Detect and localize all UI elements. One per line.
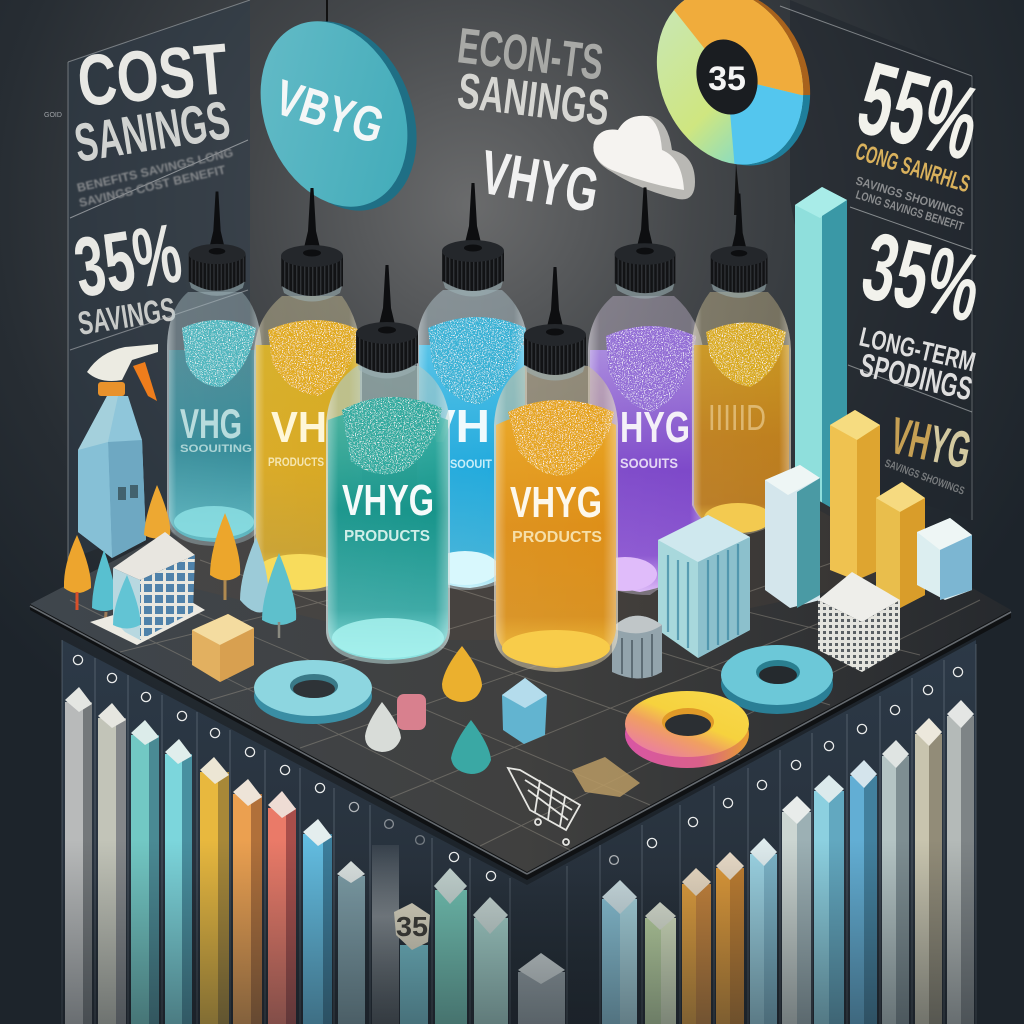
back bottle: gold: VH (271, 403, 327, 452)
panel: platform (30, 490, 1011, 880)
small text: cost savings caption: SAVINGS COST BENEFIT (78, 162, 227, 210)
bar 10 (915, 718, 942, 1024)
bar chart: center bars (394, 868, 565, 1024)
bar chart: back right blocks (830, 410, 972, 608)
statistic: 35% long-term spendings: LONG-TERM (857, 322, 978, 377)
ring: teal right (721, 645, 833, 714)
donut chart: 35: 35 (708, 60, 746, 98)
back bottle: purple: HYG (620, 403, 690, 452)
back bottle: aqua: VHG (180, 400, 242, 447)
statistic: 35% savings (68, 205, 188, 342)
heading: cost savings (70, 29, 234, 174)
panel: right statistics wall (780, 0, 991, 520)
front bottle: amber (494, 267, 618, 672)
back bottle: amber (692, 193, 791, 535)
label: VHYG tag (883, 407, 976, 498)
ring: pink and yellow (625, 691, 749, 768)
bar 6 (782, 796, 811, 1024)
icon: cloud (593, 116, 695, 199)
statistic: 35% long-term spendings (853, 212, 990, 407)
statistic: 35% savings: 35% (68, 205, 188, 315)
panel: cost savings wall (44, 0, 250, 620)
statistic: 55% cost savings: LONG SAVINGS BENEFIT (854, 187, 966, 234)
back bottle: aqua (167, 191, 262, 546)
bar 1 (602, 880, 637, 1024)
bar 2 (645, 902, 676, 1024)
building: small ribbed block (612, 616, 662, 678)
bar 8 (850, 760, 877, 1024)
icon: cardboard box (192, 614, 254, 682)
disc sign: VHYG (234, 0, 444, 233)
bar 5 (750, 838, 777, 1024)
bar: pale blue (917, 518, 972, 600)
ring: teal left (254, 660, 372, 724)
building: mesh cube (818, 572, 900, 672)
bar 7 (268, 791, 296, 1024)
heading: VHYG floating: VHYG (476, 138, 604, 226)
bar 9 (337, 861, 365, 1024)
icon: spray bottle (78, 344, 158, 558)
ghost bar (372, 845, 399, 1024)
bar chart: right ascending bars (602, 700, 974, 1024)
back bottle: blue: VH (424, 400, 490, 452)
back bottle: purple: SOOUITS (620, 455, 678, 471)
bar 8 (303, 819, 332, 1024)
bar fade overlay (60, 840, 980, 1024)
front bottle: teal: PRODUCTS (344, 528, 430, 545)
front bottle: amber: PRODUCTS (512, 529, 602, 546)
tall chart bar: teal (795, 187, 847, 570)
droplet shapes and small blocks (365, 646, 547, 774)
back bottle: purple (588, 187, 704, 595)
panel: economic savings wall: SANINGS (455, 62, 612, 136)
building: striped block (658, 515, 750, 658)
bar 4 (165, 739, 192, 1024)
back bottle: gold (254, 188, 362, 592)
bar 9 (882, 740, 909, 1024)
bar 3 (131, 720, 159, 1024)
bar: yellow tall (830, 410, 880, 580)
bar 7 (814, 775, 844, 1024)
bar teal (434, 868, 467, 1024)
back bottle: blue: SOOUIT (450, 457, 493, 471)
back bottle: aqua: SOOUITING (180, 443, 252, 455)
numbered markers (73, 655, 963, 881)
bar mint (473, 897, 508, 1024)
heading: cost savings: SANINGS (70, 90, 234, 174)
bar 5 (200, 757, 229, 1024)
label: VHYG tag: VHYG (886, 407, 976, 480)
bar 2 (98, 703, 126, 1024)
small side mark: GOID (44, 112, 62, 119)
bar with 35 label: 35 (396, 911, 428, 942)
back bottle: gold: PRODUCTS (268, 455, 324, 469)
bar 11 (947, 700, 974, 1024)
bar dividers (62, 640, 976, 1024)
back bottle: amber: IIIIID (708, 397, 766, 438)
bar 6 (233, 779, 262, 1024)
building: pale tower (765, 465, 820, 608)
back bottle: blue (417, 183, 527, 590)
icon group: cone trees (64, 485, 296, 638)
panel: under platform (62, 640, 976, 1024)
front bottle: teal (326, 265, 450, 664)
front bottle: teal: VHYG (342, 476, 434, 525)
icon: shopping cart (508, 768, 580, 845)
panel: economic savings wall (455, 17, 612, 136)
bar 1 (65, 687, 92, 1024)
panel: economic savings wall: ECON-TS (455, 17, 606, 91)
heading: cost savings: COST (74, 29, 231, 122)
icon: crumpled note (572, 757, 640, 797)
label: VHYG tag: SAVINGS SHOWINGS (883, 458, 966, 498)
bar 4 (716, 852, 744, 1024)
bar chart: left descending bars (65, 687, 399, 1024)
bar 3 (682, 868, 711, 1024)
donut chart: 35 (656, 0, 810, 215)
statistic: 35% savings: SAVINGS (75, 290, 178, 342)
bar white (518, 953, 565, 1024)
front bottle: amber: VHYG (510, 478, 602, 527)
bar with 35 label (394, 903, 430, 1024)
disc sign: VHYG: VBYG (269, 69, 390, 155)
statistic: 55% cost savings: SAVINGS SHOWINGS (854, 173, 965, 220)
building: small house (90, 532, 205, 645)
small text: cost savings caption: BENEFITS SAVINGS LONG (76, 145, 235, 195)
bar: gold short (876, 482, 925, 608)
